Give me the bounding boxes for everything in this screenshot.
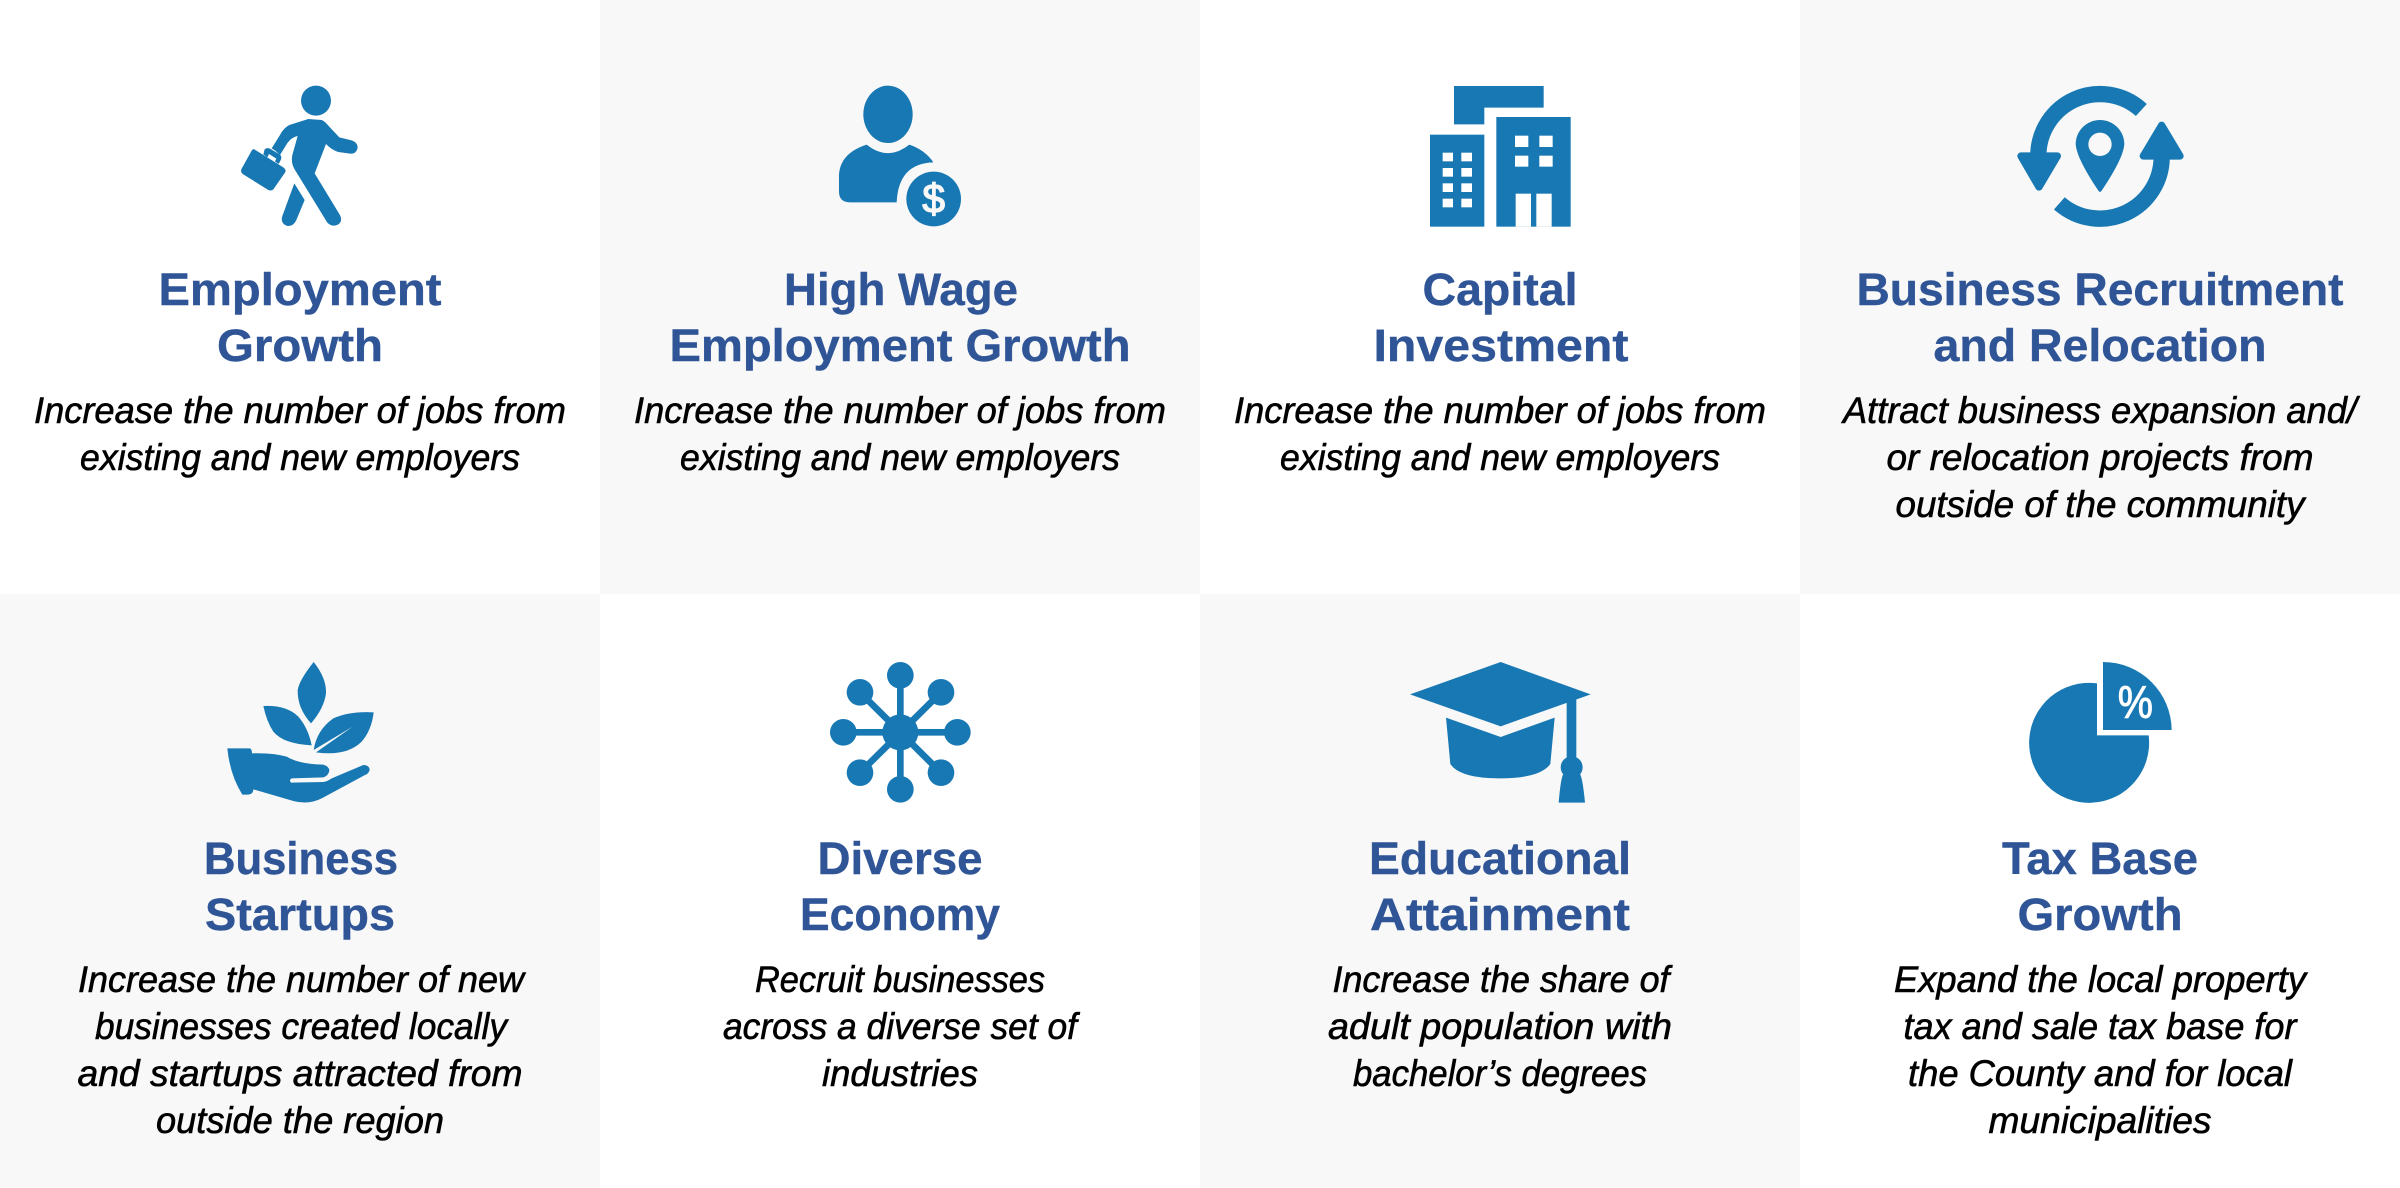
heading: Economy [800,889,1000,940]
description: Increase the number of jobs from [34,390,566,431]
heading: and Relocation [1934,320,2266,371]
description: tax and sale tax base for [1904,1006,2298,1047]
description: across a diverse set of [723,1006,1081,1047]
description [1841,390,2361,525]
heading: Educational [1369,833,1631,884]
icon: pie chart with percent [2029,662,2172,803]
description: or relocation projects from [1886,437,2314,478]
panel: Employment Growth [0,0,600,594]
description [78,959,526,1141]
description: Increase the number of jobs from [634,390,1166,431]
icon: person with dollar coin: $ [922,176,945,222]
description: municipalities [1988,1100,2212,1141]
panel: Business Startups [0,594,600,1188]
heading: Diverse [818,833,982,884]
panel: Diverse Economy [600,594,1200,1188]
heading: Tax Base [2002,833,2198,884]
icon: pie chart with percent: % [2118,677,2153,728]
icon: location pin with circular arrows [2021,94,2180,219]
heading: High Wage [784,264,1018,315]
description: outside the region [156,1100,444,1141]
description [634,390,1166,478]
heading: Investment [1374,320,1629,371]
description: Increase the number of new [78,959,526,1000]
description: existing and new employers [1280,437,1720,478]
heading: Attainment [1370,889,1630,940]
heading [800,833,1000,940]
heading: Capital [1422,264,1578,315]
icon: person with dollar coin [839,86,961,226]
heading: Employment Growth [670,320,1130,371]
description [1894,959,2308,1141]
description: bachelor’s degrees [1353,1053,1647,1094]
description [34,390,566,478]
description [723,959,1081,1094]
heading [158,264,442,371]
heading [1856,264,2344,371]
heading: Growth [217,320,383,371]
description: outside of the community [1896,484,2307,525]
heading [670,264,1130,371]
icon: walking person with briefcase [241,86,358,226]
heading [2002,833,2198,940]
heading [204,833,398,940]
icon: hub network [830,662,971,803]
icon: hand holding plant [227,662,374,802]
heading [1369,833,1631,940]
description: Increase the number of jobs from [1234,390,1766,431]
description [1234,390,1766,478]
description: the County and for local [1908,1053,2294,1094]
icon: office buildings [1430,86,1571,227]
heading [1374,264,1629,371]
heading: Growth [2018,889,2182,940]
icon: graduation cap [1410,662,1591,803]
panel: Business Recruitment and Relocation [1800,0,2400,594]
panel: Educational Attainment [1200,594,1800,1188]
description: Attract business expansion and/ [1841,390,2361,431]
description: Increase the share of [1332,959,1673,1000]
description: adult population with [1328,1006,1672,1047]
panel: High Wage Employment Growth [600,0,1200,594]
panel: Tax Base Growth [1800,594,2400,1188]
heading: Startups [205,889,395,940]
heading: Business [204,833,398,884]
panel: Capital Investment [1200,0,1800,594]
description: businesses created locally [95,1006,509,1047]
heading: Employment [158,264,442,315]
description [1328,959,1673,1094]
description: industries [822,1053,978,1094]
description: existing and new employers [680,437,1120,478]
heading: Business Recruitment [1856,264,2344,315]
description: existing and new employers [80,437,520,478]
description: Expand the local property [1894,959,2308,1000]
description: and startups attracted from [78,1053,522,1094]
description: Recruit businesses [755,959,1045,1000]
